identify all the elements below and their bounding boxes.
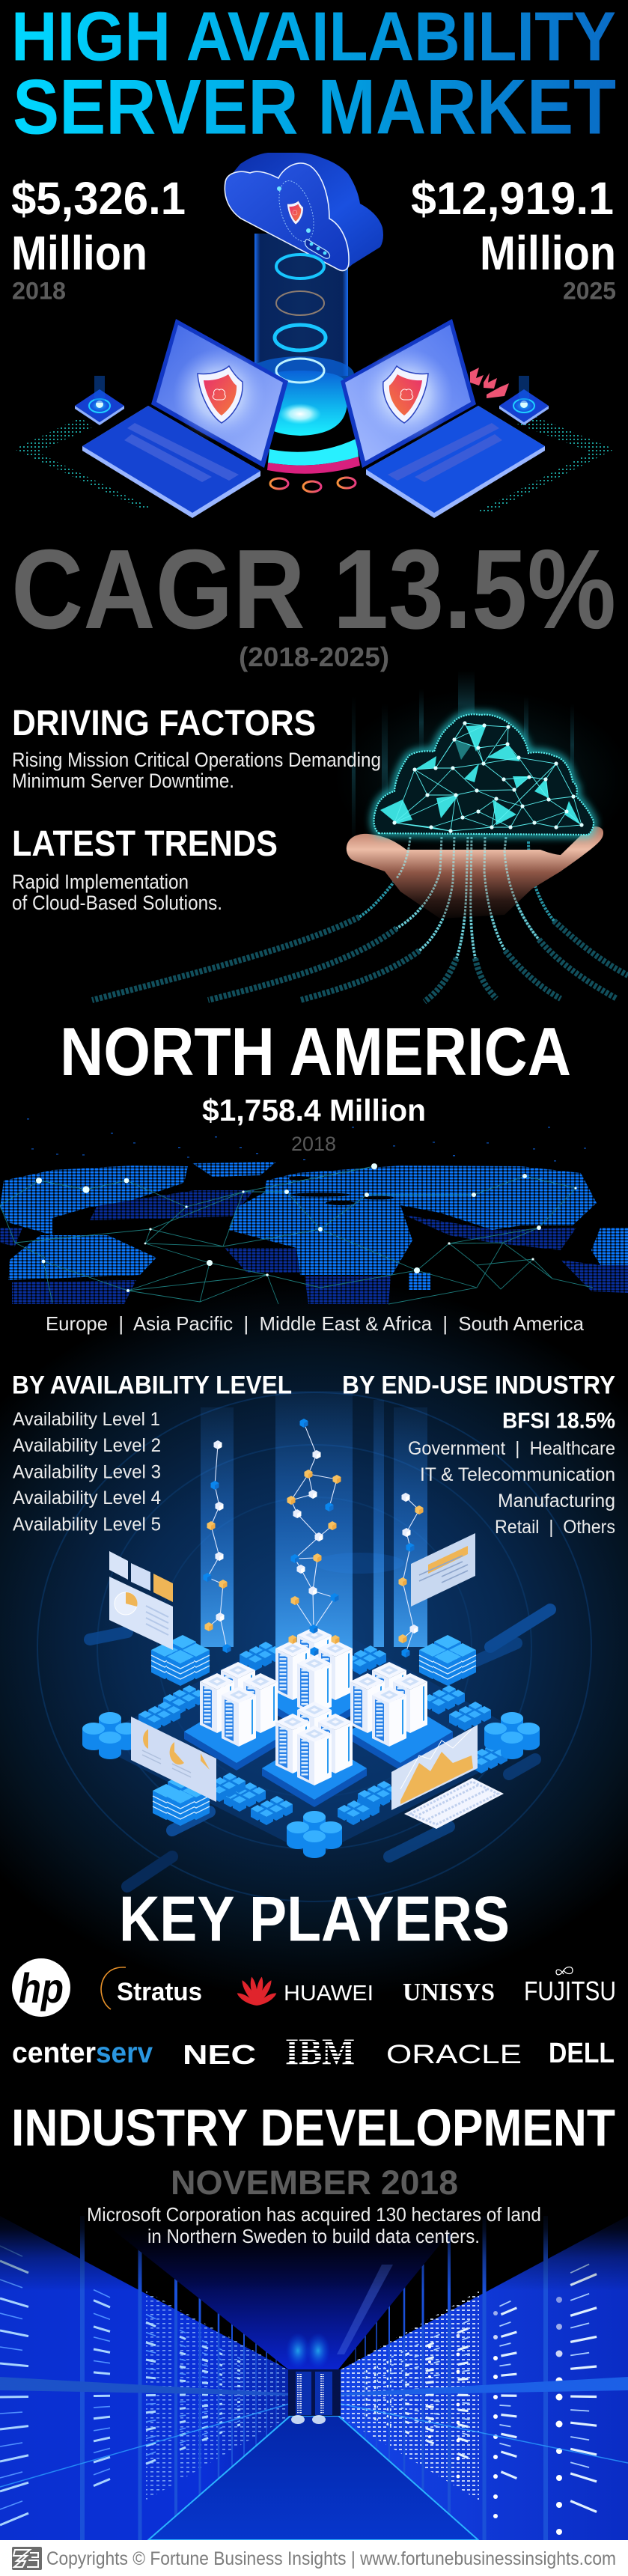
racks left cluster: [200, 1662, 278, 1747]
market value 2025: [411, 173, 616, 304]
left wall light streaks: [0, 2246, 314, 2525]
code panel right: [411, 1533, 475, 1607]
by availability level: [12, 1371, 292, 1535]
scattered dots above map: [27, 1118, 586, 1162]
seas: [289, 1176, 394, 1205]
right laptop: [341, 319, 545, 518]
isometric data center illustration: [37, 1391, 591, 1901]
regional heading: [60, 1014, 571, 1155]
racks bottom cluster: [275, 1702, 353, 1785]
driving factors: Rising Mission Critical Operations Demanding: [12, 749, 381, 771]
logo: Huawei: [236, 1976, 374, 2008]
logo: Stratus: [101, 1967, 202, 2009]
small cubes: [138, 1642, 507, 1825]
white status lights right: [428, 2297, 563, 2535]
cylinders right: [484, 1712, 540, 1759]
data center section background: [0, 1280, 628, 1999]
cylinders: [82, 1712, 138, 1759]
by availability level: Availability Level 2: [13, 1435, 161, 1456]
dotted floor right: [476, 414, 615, 512]
by end-use industry: Manufacturing: [498, 1491, 615, 1511]
logo: Centerserv: center: [12, 2037, 96, 2069]
dense lights near vanishing point, right: [337, 2291, 479, 2500]
rings in beam: [275, 255, 326, 350]
logo: Dell: DELL: [549, 2038, 615, 2069]
area chart panel lower right: [391, 1725, 478, 1810]
logo: Oracle: ORACLE: [386, 2040, 522, 2069]
dashboard panel top left: [109, 1551, 173, 1650]
end wall: [288, 2369, 341, 2424]
logo: NEC: NEC: [183, 2039, 256, 2070]
title: [11, 0, 616, 151]
regional heading: NORTH AMERICA: [60, 1014, 571, 1090]
racks right cluster: [350, 1662, 427, 1747]
footer logo: [12, 2547, 42, 2570]
horizontal bands: [0, 2377, 292, 2396]
right wall: [337, 2216, 628, 2540]
footer bar: [0, 2540, 628, 2576]
rack posts: [82, 2216, 546, 2540]
by end-use industry: Retail | Others: [495, 1517, 615, 1538]
hand: [347, 826, 603, 919]
regional heading: $1,758.4 Million: [202, 1093, 426, 1127]
cloud glow: [333, 689, 628, 868]
logo: Centerserv: serv: [96, 2037, 153, 2069]
data center corridor photo: [0, 2208, 628, 2540]
market value 2018: Million: [11, 226, 147, 280]
pie panel lower left: [131, 1717, 216, 1802]
development description: in Northern Sweden to build data centers.: [147, 2225, 480, 2247]
streams over hand: [397, 837, 539, 958]
logo: Unisys: UNISYS: [403, 1979, 495, 2006]
dotted floor left: [14, 418, 153, 509]
development description: Microsoft Corporation has acquired 130 hectares of land: [87, 2203, 541, 2226]
regional heading: 2018: [291, 1133, 336, 1155]
cloud: [225, 153, 383, 271]
logo: IBM: IBM: [285, 2030, 355, 2072]
industry development heading: [11, 2098, 615, 2202]
ceiling: [86, 2208, 469, 2369]
base dome: [246, 356, 360, 474]
industry development heading: NOVEMBER 2018: [171, 2164, 458, 2202]
CAGR: (2018-2025): [239, 642, 389, 672]
logo: Huawei: HUAWEI: [284, 1982, 374, 2006]
key players heading: KEY PLAYERS: [119, 1884, 510, 1955]
cylinders bottom: [287, 1811, 342, 1858]
latest trends: [12, 824, 278, 914]
hero illustration: cloud, laptops and data beam: [14, 153, 615, 518]
network nodes: [36, 1163, 577, 1292]
network lines: [0, 1166, 593, 1304]
network cloud: [374, 714, 594, 835]
light column: [254, 234, 348, 376]
by availability level: Availability Level 1: [13, 1409, 160, 1430]
left laptop: [82, 319, 288, 518]
driving factors: Minimum Server Downtime.: [12, 770, 234, 792]
logo: Centerserv: [12, 2037, 153, 2069]
hand holding cloud illustration: [92, 670, 628, 1002]
by end-use industry: BY END-USE INDUSTRY: [342, 1371, 615, 1400]
by availability level: Availability Level 3: [13, 1461, 161, 1482]
ceiling lights: [286, 2265, 393, 2369]
node chains: [204, 1419, 424, 1657]
data streams far: [92, 917, 628, 1002]
dense lights near vanishing point, left: [146, 2291, 292, 2500]
light beams: [201, 1391, 427, 1649]
other regions: Europe | Asia Pacific | Middle East & Africa | South America: [46, 1312, 585, 1335]
floor: [37, 1392, 591, 1901]
faint vertical light: [352, 670, 574, 846]
driving factors: [12, 704, 381, 792]
server stacks: [151, 1635, 476, 1826]
market value 2018: [11, 173, 186, 304]
by availability level: Availability Level 4: [13, 1488, 161, 1508]
market value 2018: $5,326.1: [11, 173, 186, 224]
key player logos: [12, 1958, 616, 2072]
lower rack cyan edge: [0, 2403, 628, 2487]
by end-use industry: IT & Telecommunication: [420, 1464, 615, 1485]
logo: Stratus: Stratus: [117, 1978, 202, 2006]
by end-use industry: [342, 1371, 615, 1538]
dim landmass: [0, 1190, 628, 1304]
latest trends: LATEST TRENDS: [12, 824, 278, 864]
data streams near: [359, 841, 554, 958]
pink chevrons: [470, 368, 509, 398]
platforms: [184, 1667, 453, 1807]
by end-use industry: BFSI 18.5%: [502, 1409, 615, 1433]
floor: [148, 2416, 478, 2540]
by end-use industry: Government | Healthcare: [408, 1438, 615, 1459]
logo: HP: hp: [19, 1964, 64, 2012]
world map: [0, 1118, 628, 1304]
driving factors: DRIVING FACTORS: [12, 704, 316, 743]
keyboard: [404, 1778, 504, 1829]
by availability level: BY AVAILABILITY LEVEL: [12, 1371, 292, 1400]
latest trends: Rapid Implementation: [12, 871, 189, 893]
market value 2025: 2025: [563, 277, 616, 304]
bright landmass: [0, 1162, 628, 1290]
market value 2025: $12,919.1: [411, 173, 614, 224]
by availability level: Availability Level 5: [13, 1514, 161, 1535]
market value 2025: Million: [480, 226, 616, 280]
top fade: [0, 2208, 628, 2291]
market value 2018: 2018: [12, 277, 66, 304]
latest trends: of Cloud-Based Solutions.: [12, 892, 222, 914]
orange rings: [270, 478, 356, 492]
racks top cluster: [275, 1627, 353, 1715]
development description: [87, 2203, 541, 2247]
pads: [75, 376, 124, 425]
pad right: [499, 376, 549, 425]
left wall: [0, 2216, 292, 2540]
right wall light streaks: [314, 2246, 628, 2525]
